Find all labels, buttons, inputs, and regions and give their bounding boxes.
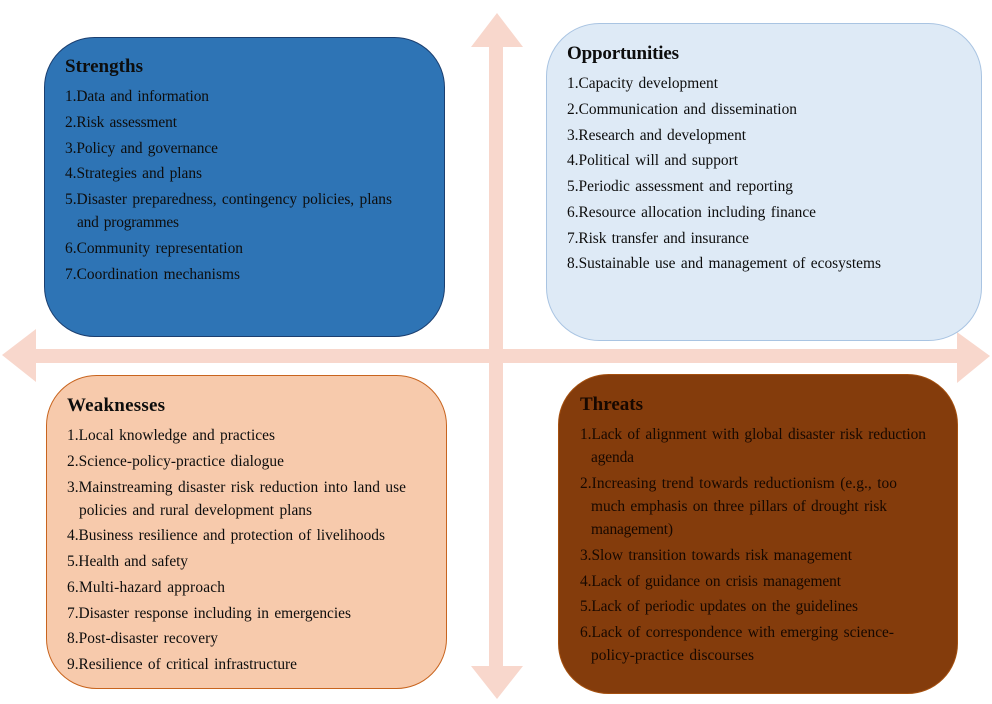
heading: threats: Threats [580, 394, 643, 415]
list: opportunities: 4.Political will and support [567, 152, 739, 169]
list: weaknesses: 8.Post-disaster recovery [67, 630, 218, 647]
panel: opportunities [546, 24, 982, 340]
list: weaknesses: 4.Business resilience and protection of livelihoods [67, 527, 385, 544]
list: threats: 1.Lack of alignment with global disaster risk reduction [580, 426, 926, 443]
list: threats: 2.Increasing trend towards reductionism (e.g., too [580, 475, 897, 492]
panel: strengths [44, 38, 444, 336]
list: weaknesses [67, 427, 406, 673]
list: weaknesses: 9.Resilience of critical infrastructure [67, 656, 297, 673]
list: threats: 5.Lack of periodic updates on the guidelines [580, 598, 858, 615]
list: strengths: 1.Data and information [65, 88, 209, 105]
list: weaknesses: 7.Disaster response including in emergencies [67, 605, 351, 622]
list: weaknesses: 6.Multi-hazard approach [67, 579, 225, 596]
horizontal double-headed arrow [2, 329, 990, 383]
list: threats: 3.Slow transition towards risk management [580, 547, 853, 564]
list: threats: much emphasis on three pillars of drought risk [591, 498, 887, 515]
list: strengths: 7.Coordination mechanisms [65, 266, 240, 283]
list: weaknesses: 2.Science-policy-practice dialogue [67, 453, 284, 470]
list: threats [580, 426, 926, 664]
list: strengths: 5.Disaster preparedness, contingency policies, plans [65, 191, 392, 208]
heading: weaknesses: Weaknesses [67, 395, 165, 416]
list: opportunities: 7.Risk transfer and insurance [567, 230, 749, 247]
list: opportunities: 3.Research and development [567, 127, 747, 144]
list: opportunities: 2.Communication and dissemination [567, 101, 797, 118]
list: strengths: and programmes [77, 214, 179, 231]
list: strengths: 6.Community representation [65, 240, 243, 257]
list: strengths: 3.Policy and governance [65, 140, 218, 157]
heading: opportunities: Opportunities [567, 43, 679, 64]
list: opportunities: 8.Sustainable use and management of ecosystems [567, 255, 881, 272]
list: opportunities [567, 75, 881, 272]
panel: threats [558, 374, 958, 694]
list: threats: 6.Lack of correspondence with emerging science- [580, 624, 894, 641]
list: opportunities: 1.Capacity development [567, 75, 719, 92]
list: opportunities: 5.Periodic assessment and reporting [567, 178, 793, 195]
list: threats: agenda [591, 449, 634, 466]
list: strengths: 4.Strategies and plans [65, 165, 202, 182]
list: threats: policy-practice discourses [591, 647, 754, 664]
list: threats: management) [591, 521, 673, 538]
heading: strengths: Strengths [65, 56, 143, 77]
panel: weaknesses [46, 376, 446, 688]
list: weaknesses: 5.Health and safety [67, 553, 188, 570]
list: strengths [65, 88, 392, 283]
list: opportunities: 6.Resource allocation including finance [567, 204, 816, 221]
vertical double-headed arrow [471, 13, 523, 699]
list: weaknesses: policies and rural development plans [79, 502, 312, 519]
list: threats: 4.Lack of guidance on crisis management [580, 573, 842, 590]
list: strengths: 2.Risk assessment [65, 114, 178, 131]
list: weaknesses: 1.Local knowledge and practices [67, 427, 275, 444]
list: weaknesses: 3.Mainstreaming disaster risk reduction into land use [67, 479, 406, 496]
